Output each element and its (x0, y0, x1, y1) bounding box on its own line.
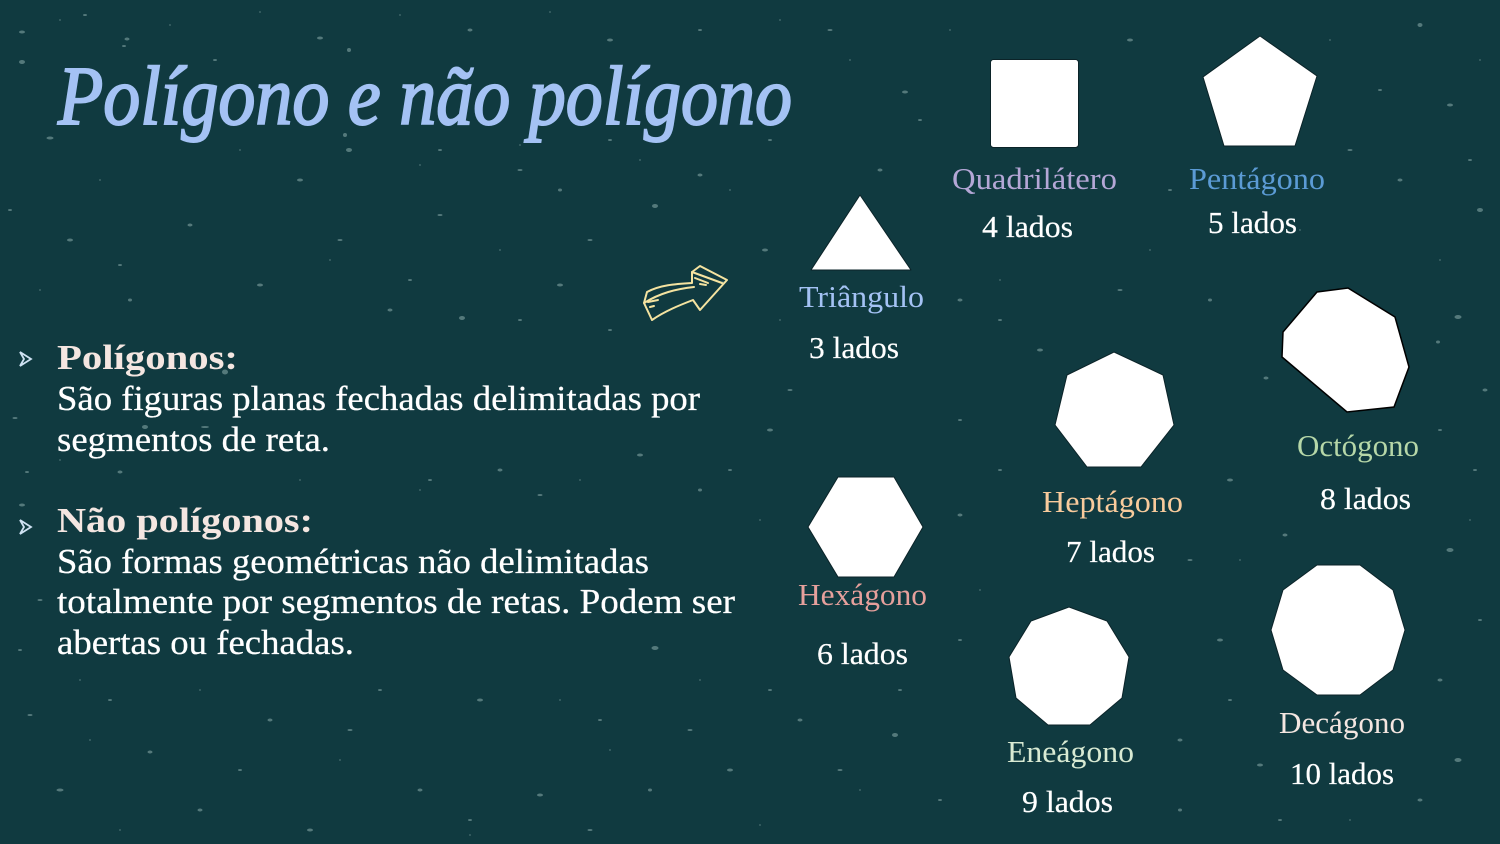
icon: hand-drawn arrow (644, 266, 727, 320)
heading: não polígonos: Não polígonos: (57, 501, 313, 540)
text: non-polygon definition (57, 542, 735, 662)
label: triângulo: Triângulo (799, 279, 924, 314)
triangle (799, 195, 924, 365)
shape: triangle (811, 195, 911, 270)
hexagon (798, 477, 927, 671)
label: 8 sides: 8 lados (1320, 481, 1411, 516)
decagon (1271, 565, 1405, 791)
label: heptágono: Heptágono (1042, 484, 1183, 519)
label: 10 sides: 10 lados (1290, 756, 1394, 791)
text: non-polygon definition: totalmente por segmentos de retas. Podem ser (57, 582, 735, 621)
label: 5 sides: 5 lados (1208, 205, 1297, 240)
label: decágono: Decágono (1279, 705, 1405, 740)
nonagon (1007, 607, 1134, 819)
heading: polígonos: Polígonos: (57, 338, 238, 377)
text: polygon definition (57, 379, 700, 459)
shape: heptagon (1055, 352, 1174, 467)
octagon (1282, 288, 1419, 516)
text: polygon definition: São figuras planas fechadas delimitadas por (57, 379, 700, 418)
label: octógono: Octógono (1297, 428, 1419, 463)
quadrilateral (952, 60, 1117, 244)
label: 3 sides: 3 lados (809, 330, 899, 365)
shape: pentagon (1203, 36, 1317, 146)
label: 9 sides: 9 lados (1022, 784, 1113, 819)
label: quadrilátero: Quadrilátero (952, 161, 1117, 196)
shape: hexagon (808, 477, 923, 577)
text: non-polygon definition: abertas ou fechadas. (57, 623, 354, 662)
shape: decagon (1271, 565, 1405, 695)
label: pentágono: Pentágono (1189, 161, 1325, 196)
heptagon (1042, 352, 1183, 569)
label: hexágono: Hexágono (798, 577, 927, 612)
shape: nonagon (1009, 607, 1129, 725)
label: eneágono: Eneágono (1007, 734, 1134, 769)
label: 7 sides: 7 lados (1066, 534, 1155, 569)
label: 4 sides: 4 lados (982, 209, 1073, 244)
label: 6 sides: 6 lados (817, 636, 908, 671)
text: non-polygon definition: São formas geométricas não delimitadas (57, 542, 649, 581)
bullet: não polígonos (20, 520, 31, 534)
title: Polígono e não polígono (57, 50, 792, 143)
pentagon (1189, 36, 1325, 240)
shape: octagon (1282, 288, 1409, 412)
bullet: polígonos (20, 352, 31, 366)
text block: definitions (20, 338, 735, 662)
shape: square (990, 60, 1078, 148)
text: polygon definition: segmentos de reta. (57, 420, 330, 459)
